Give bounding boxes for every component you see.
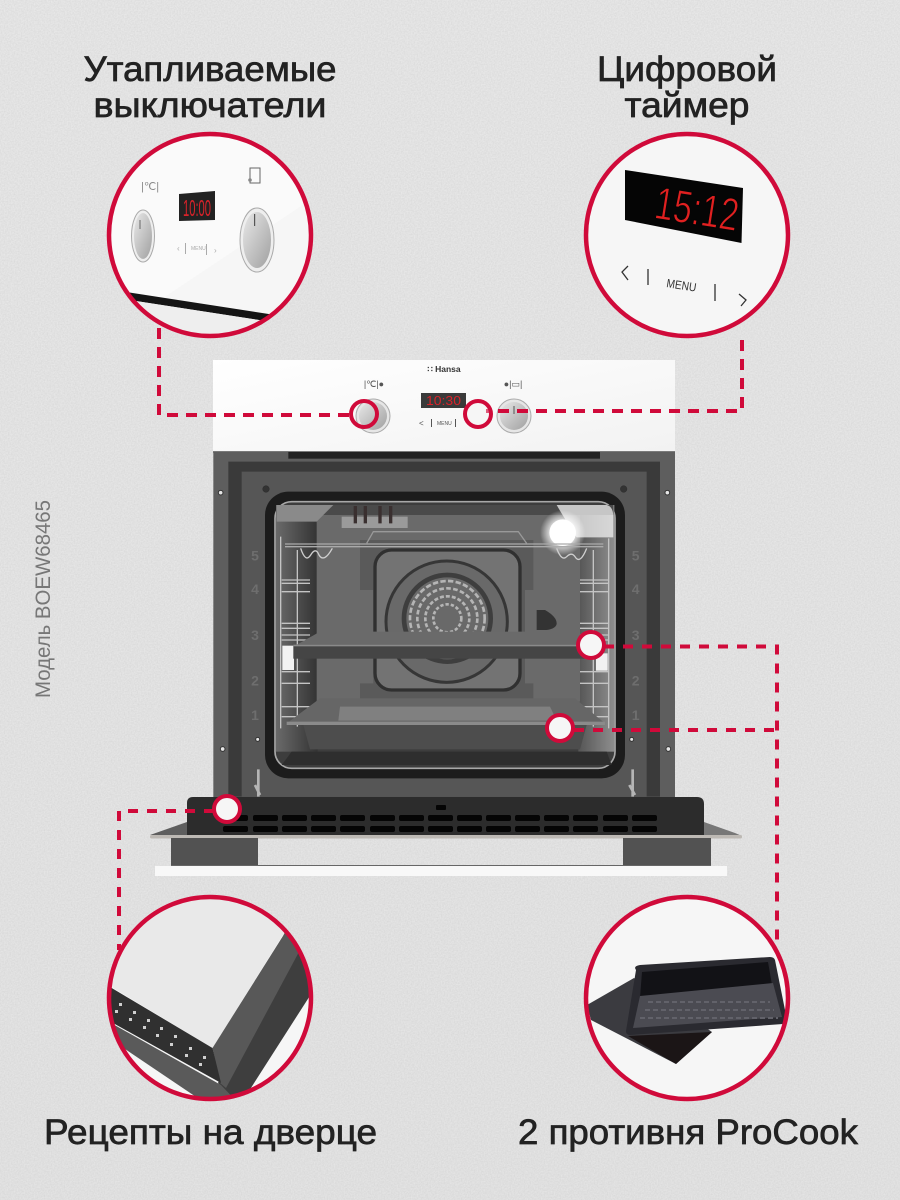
left knob [356,399,390,433]
oven [150,360,742,876]
bottom shelf [155,865,727,876]
touch controls: MENU [437,421,452,427]
rack number labels: 3 [632,627,640,643]
black trim [130,292,270,320]
small touch labels: › [214,246,217,255]
detail circle: ProCook trays [584,895,790,1101]
small knob [132,210,154,262]
front tray [626,957,787,1035]
heading: recipes on the door: Рецепты на дверце [44,1113,377,1152]
connector: lower tray [574,728,777,732]
small touch labels: MENU [191,246,206,252]
marker: upper tray [578,632,604,658]
timer display: 15:12 [651,177,743,241]
wire rack [285,532,603,559]
frame screws [218,490,671,751]
menu label: MENU [666,276,697,295]
brand logo: ∷ Hansa [427,364,461,374]
rack number labels: 2 [251,673,259,689]
door hinges [255,769,635,797]
door vents [223,805,657,832]
small display: 10:00 [183,195,211,221]
base shadow wedges [150,822,742,836]
connector: knobs [159,328,350,415]
heading: retractable knobs line 2: выключатели [94,86,326,125]
detail circle: retractable knobs [100,132,313,345]
connector: upper tray [604,646,777,945]
rack number labels: 1 [251,707,259,723]
small symbols: |℃| [141,181,159,193]
temperature symbol: |℃|● [364,379,384,389]
door frame [212,933,309,1095]
heading: digital timer line 2: таймер [624,86,750,125]
left leg [171,838,258,866]
marker: left knob [351,401,377,427]
connector: timer [486,340,742,411]
small symbols [141,168,260,193]
fan grille [404,575,491,662]
rack number labels: 4 [632,581,640,597]
small touch labels [177,243,217,255]
model label: Модель BOEW68465 [32,500,55,698]
right knob [497,399,531,433]
marker: door [214,796,240,822]
steel trim [150,835,742,838]
oven control panel [213,360,675,453]
marker: lower tray [547,715,573,741]
display: 10:30 [426,393,461,408]
small display [179,191,215,221]
detail circle: recipes on the door [100,890,320,1105]
detail circle: timer [584,132,790,338]
rack number labels: 5 [632,548,640,564]
marker: timer [465,401,491,427]
large knob [240,208,274,272]
touch controls [419,419,456,428]
open door edge [187,797,704,835]
heading: retractable knobs: Утапливаемые [84,50,336,89]
touch controls: < [419,419,424,428]
rack number labels: 5 [251,548,259,564]
small touch labels: ‹ [177,244,180,253]
timer touch controls [622,266,746,306]
oven cavity [213,452,675,798]
rack number labels: 1 [632,707,640,723]
recipe strip [105,984,221,1083]
heading: two ProCook trays: 2 противня ProCook [518,1113,859,1152]
right leg [623,838,711,866]
connector: door recipes [119,811,214,950]
rack number labels: 3 [251,627,259,643]
door bottom edge [115,1025,230,1097]
function symbol: ●|▭| [504,379,522,389]
oven lamp [540,505,613,555]
rack number labels: 4 [251,581,259,597]
heading: digital timer: Цифровой [597,50,777,89]
rack number labels [251,548,640,723]
rack number labels: 2 [632,673,640,689]
lower baking tray [287,698,605,749]
back tray [587,978,712,1064]
door glass [112,900,284,1048]
upper baking tray [293,632,585,659]
